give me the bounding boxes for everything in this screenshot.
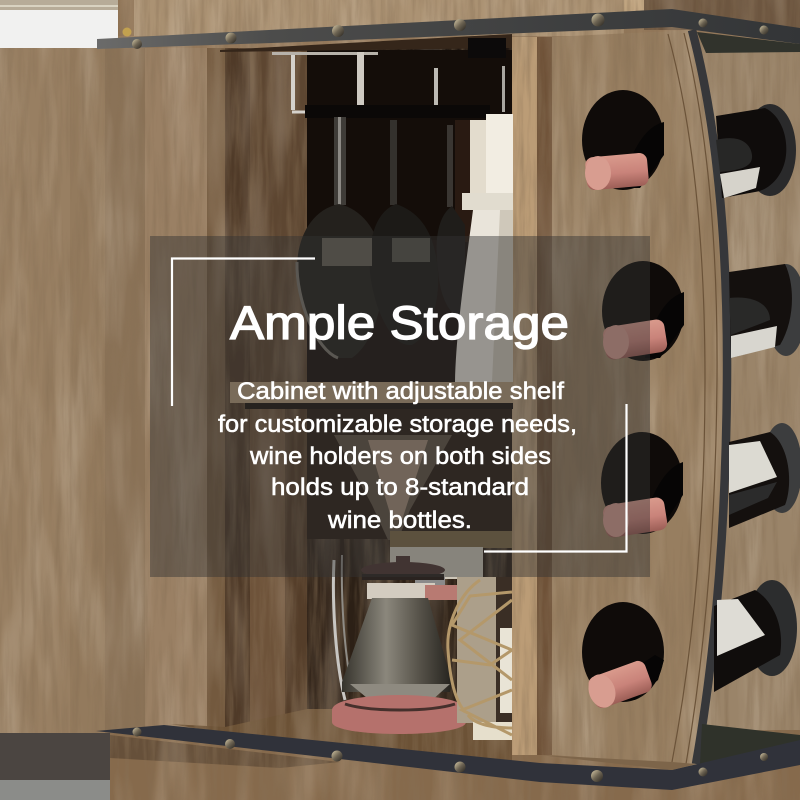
dark cabinet back wall bbox=[307, 50, 512, 539]
description text: wine bottles. bbox=[327, 507, 472, 534]
wine glasses bbox=[297, 117, 465, 358]
rear wood panel on the right bbox=[700, 40, 800, 740]
white pepper grinder and bottle bbox=[455, 114, 513, 382]
metal edge of curved side panel bbox=[692, 30, 727, 764]
central wooden divider post bbox=[512, 37, 552, 755]
translucent text panel bbox=[150, 236, 650, 577]
white wall and picture frame behind cabinet bbox=[0, 0, 118, 48]
description text: for customizable storage needs, bbox=[218, 411, 577, 438]
cabinet interior walls bbox=[207, 48, 513, 728]
wine holder hole 3 with bottle bbox=[601, 432, 683, 539]
cork lid and cream jar bbox=[390, 531, 512, 587]
title: Ample Storage bbox=[230, 296, 569, 349]
glass funnel on shelf below bbox=[333, 435, 452, 700]
glass kettle with pink base bbox=[332, 556, 466, 734]
description text: holds up to 8-standard bbox=[271, 474, 529, 501]
hanging wine glass rack bbox=[272, 38, 506, 118]
wine holder hole 2 with bottle bbox=[602, 261, 684, 361]
description text bbox=[218, 378, 577, 534]
open cabinet door bbox=[0, 48, 207, 733]
protruding bottle 2 on rear side bbox=[729, 264, 800, 358]
curved side panel bbox=[552, 30, 727, 766]
protruding bottle 1 on rear side bbox=[716, 104, 796, 198]
top-left corner frame bbox=[172, 258, 315, 406]
bottom metal band with rivets bbox=[96, 724, 800, 790]
top underside shadow strip bbox=[220, 34, 512, 52]
protruding bottle 3 on rear side bbox=[729, 423, 800, 528]
description text: Cabinet with adjustable shelf bbox=[237, 378, 564, 405]
wine holder hole 4 with bottle bbox=[582, 602, 664, 711]
cabinet floor bbox=[170, 709, 512, 765]
description text: wine holders on both sides bbox=[249, 443, 551, 470]
adjustable shelf bbox=[230, 382, 513, 409]
wine holder hole 1 with bottle bbox=[582, 90, 664, 191]
rope-wrapped jute lantern bbox=[448, 577, 512, 740]
bottom-right corner frame bbox=[484, 404, 626, 552]
sofa and floor seen under door bbox=[0, 733, 110, 800]
top metal band with rivets bbox=[97, 9, 800, 53]
lower cabinet wood front bbox=[110, 730, 800, 800]
protruding bottle 4 on rear side bbox=[714, 580, 797, 692]
